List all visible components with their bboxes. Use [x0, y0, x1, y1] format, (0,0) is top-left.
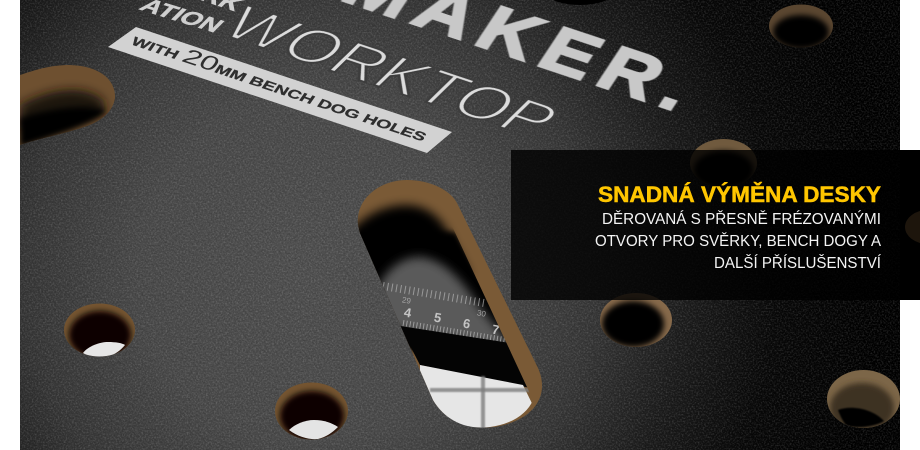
wall shading	[20, 90, 106, 130]
interior dark	[350, 232, 520, 350]
light through hole	[83, 342, 125, 357]
description: DALŠÍ PŘÍSLUŠENSTVÍ	[714, 253, 882, 272]
faint hole behind panel	[905, 210, 920, 244]
hole: lower middle	[600, 293, 672, 347]
ruler numbers: 7	[491, 322, 501, 338]
hole interior	[830, 383, 894, 433]
description: DĚROVANÁ S PŘESNĚ FRÉZOVANÝMI	[602, 209, 881, 228]
ruler small numbers: 29	[401, 295, 412, 306]
window frame vertical shadow	[481, 376, 485, 428]
hole: top edge shadow	[548, 0, 612, 5]
ruler numbers: 4	[403, 305, 413, 321]
lit surface through slot	[378, 251, 507, 344]
side panel	[511, 150, 920, 300]
window frame horizontal shadow	[430, 388, 535, 392]
ruler small numbers: 30	[476, 308, 487, 319]
hole: bottom right	[827, 370, 900, 428]
hole: bottom left	[64, 304, 135, 356]
description: OTVORY PRO SVĚRKY, BENCH DOGY A	[595, 231, 881, 250]
heading: SNADNÁ VÝMĚNA DESKY	[598, 182, 881, 207]
hole depth	[773, 15, 829, 49]
ruler top ticks	[383, 286, 484, 303]
slot floor	[20, 107, 106, 147]
panel right edge fill	[900, 150, 920, 300]
ruler small numbers	[402, 297, 486, 316]
central slot	[358, 180, 542, 428]
hole: bottom centre	[275, 382, 348, 440]
ruler numbers	[404, 308, 500, 334]
slot upper shadow	[340, 205, 470, 290]
hole depth	[602, 301, 664, 347]
light through hole	[289, 420, 338, 439]
slot interior	[360, 228, 532, 428]
slot wall	[358, 180, 542, 428]
slot wall	[20, 65, 115, 145]
hole: under panel	[690, 139, 757, 186]
ruler bottom ticks	[403, 323, 505, 340]
hole: top right	[769, 4, 833, 48]
white floor	[420, 365, 532, 428]
printed label strip	[108, 27, 452, 153]
hole depth	[280, 391, 344, 441]
ruler numbers: 6	[462, 316, 472, 332]
ruler numbers: 5	[433, 310, 443, 326]
hole: top left slot	[20, 65, 115, 145]
black band	[400, 326, 528, 388]
printed heading: worktop: WORKTOP	[209, 0, 573, 148]
strip text: WITH 20MM BENCH DOG HOLES	[127, 28, 434, 146]
panel background	[511, 150, 920, 300]
hole depth	[69, 311, 131, 359]
description	[595, 209, 882, 272]
hole depth	[694, 151, 754, 189]
dark floor	[838, 408, 884, 427]
